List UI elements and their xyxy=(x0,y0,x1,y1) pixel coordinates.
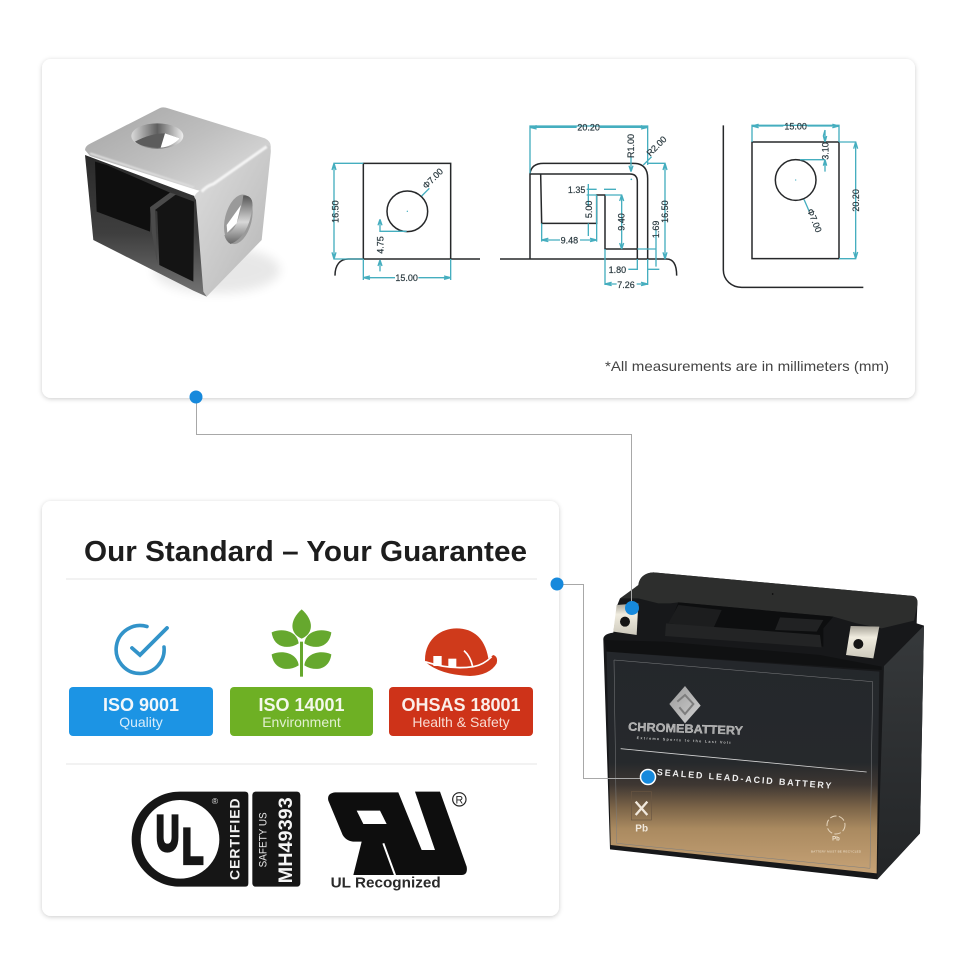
logo: UL recognized mark: UL Recognized xyxy=(331,875,441,891)
logo: UL certified mark: CERTIFIED xyxy=(226,798,242,880)
diagram: side profile drawing: R2.00 xyxy=(645,134,669,158)
logo: UL certified mark: L xyxy=(182,820,203,875)
panel: certifications xyxy=(42,501,559,916)
symbol: recycling: Pb xyxy=(832,837,840,843)
marker: dimensions panel xyxy=(190,390,202,404)
diagram: side profile drawing: 1.80 xyxy=(609,265,626,275)
logo: UL recognized mark xyxy=(328,792,467,891)
diagram: top view drawing: 15.00 xyxy=(784,122,807,132)
symbol: crossed bin xyxy=(631,792,651,835)
terminal: left xyxy=(613,603,638,635)
icon: quality check xyxy=(116,625,167,673)
diagram: top view drawing: 20.20 xyxy=(851,189,861,212)
battery silhouette xyxy=(603,572,924,879)
registered symbol: R xyxy=(455,794,463,806)
connector: panel to terminal xyxy=(196,397,632,605)
logo: UL certified mark xyxy=(132,792,300,887)
symbol: recycling xyxy=(811,816,862,853)
logo: UL certified mark: SAFETY US xyxy=(258,812,270,867)
badge: ISO 14001: ISO 14001 xyxy=(258,695,345,715)
connector: certifications to battery label xyxy=(557,584,648,778)
logo: UL certified mark: U xyxy=(156,805,179,861)
logo: UL certified mark: MH49393 xyxy=(276,797,297,883)
battery lid xyxy=(604,572,917,670)
marker: certifications panel xyxy=(550,578,564,590)
icon: green leaf plant xyxy=(272,609,331,677)
diagram: side profile drawing: 9.40 xyxy=(616,213,626,231)
badge: ISO 9001 xyxy=(69,687,213,736)
battery front label xyxy=(607,652,879,873)
panel: terminal dimensions xyxy=(42,59,915,398)
measurement note: *All measurements are in millimeters (mm) xyxy=(605,358,889,374)
logo: UL certified mark: ® xyxy=(212,796,219,806)
diagram: side profile drawing: 9.48 xyxy=(561,235,578,245)
badge: OHSAS 18001: OHSAS 18001 xyxy=(401,695,521,715)
diagram: top view drawing xyxy=(723,122,863,287)
heading: Our Standard – Your Guarantee xyxy=(84,536,527,568)
badge: ISO 14001 xyxy=(230,687,373,736)
diagram: top view drawing: Φ7.00 xyxy=(805,207,824,234)
diagram: front view drawing: Φ7.00 xyxy=(421,166,445,191)
symbol: crossed bin: Pb xyxy=(635,824,648,835)
icon: hard hat xyxy=(425,628,497,676)
diagram: side profile drawing: R1.00 xyxy=(626,134,636,158)
battery logo xyxy=(628,686,743,745)
diagram: side profile drawing xyxy=(500,123,677,290)
badge: ISO 14001: Environment xyxy=(262,714,341,730)
icon: side hole xyxy=(219,192,257,247)
diagram: front view drawing: 15.00 xyxy=(395,273,418,283)
battery product name: SEALED LEAD-ACID BATTERY xyxy=(657,767,832,791)
diagram: side profile drawing: 20.20 xyxy=(577,123,600,133)
diagram: side profile drawing: 7.26 xyxy=(617,280,635,290)
icon: top hole xyxy=(131,123,183,149)
diagram: side profile drawing: 16.50 xyxy=(660,200,670,223)
diagram: side profile drawing: 5.00 xyxy=(584,201,594,218)
badge: OHSAS 18001 xyxy=(389,687,533,736)
photo: battery xyxy=(603,572,924,879)
badge: ISO 9001: ISO 9001 xyxy=(103,695,179,715)
battery logo: CHROMEBATTERY xyxy=(628,720,743,738)
battery logo: Extreme Sports to the Last Volt xyxy=(637,736,731,745)
icon: metal terminal block xyxy=(85,107,280,297)
badge: OHSAS 18001: Health & Safety xyxy=(412,714,510,730)
symbol: recycling: BATTERY MUST BE RECYCLED xyxy=(811,849,862,853)
diagram: side profile drawing: 1.35 xyxy=(568,185,585,195)
badge: ISO 9001: Quality xyxy=(119,714,163,730)
diagram: top view drawing: 3.10 xyxy=(820,142,830,160)
diagram: side profile drawing: 1.69 xyxy=(651,221,661,238)
diagram: front view drawing: 4.75 xyxy=(375,236,385,254)
diagram: front view drawing: 16.50 xyxy=(331,200,341,223)
marker: battery terminal xyxy=(625,601,639,615)
diagram: front view drawing xyxy=(331,163,480,283)
marker: battery label xyxy=(640,770,656,784)
terminal: right xyxy=(846,626,879,658)
battery side xyxy=(877,626,924,879)
